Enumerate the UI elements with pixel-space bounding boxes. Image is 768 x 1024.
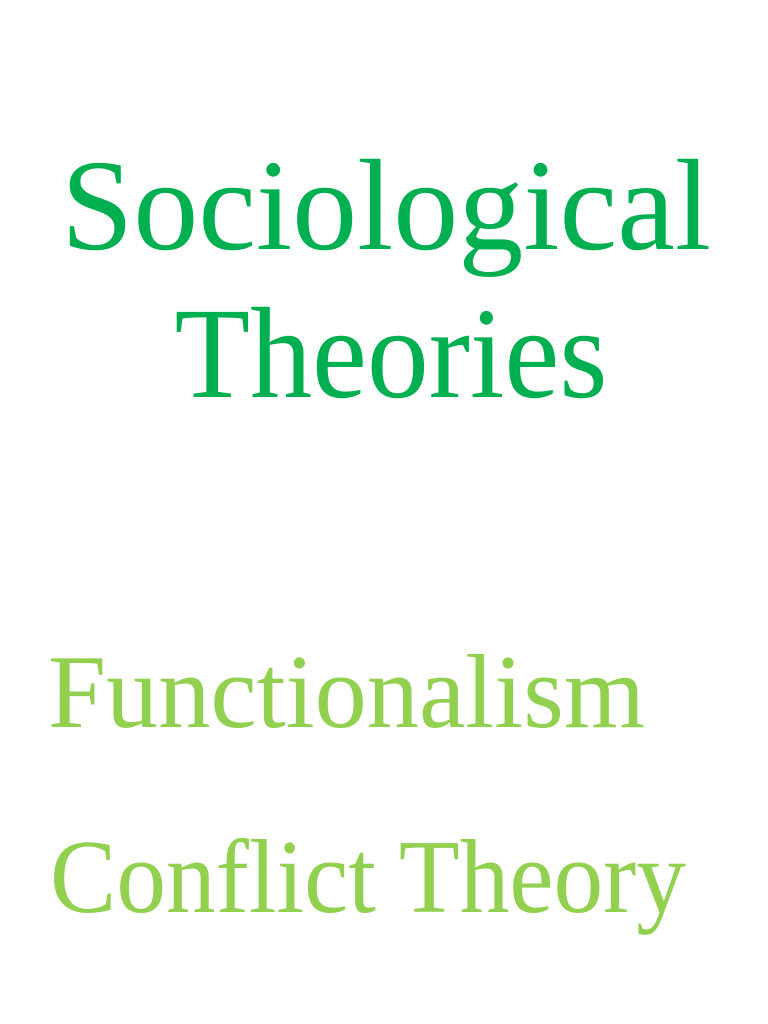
list item: Functionalism: Functionalism — [48, 633, 645, 750]
list item: Conflict Theory: Conflict Theory — [50, 818, 686, 935]
title: Theories — [174, 282, 608, 426]
title — [61, 134, 711, 426]
title: Sociological — [61, 134, 711, 278]
